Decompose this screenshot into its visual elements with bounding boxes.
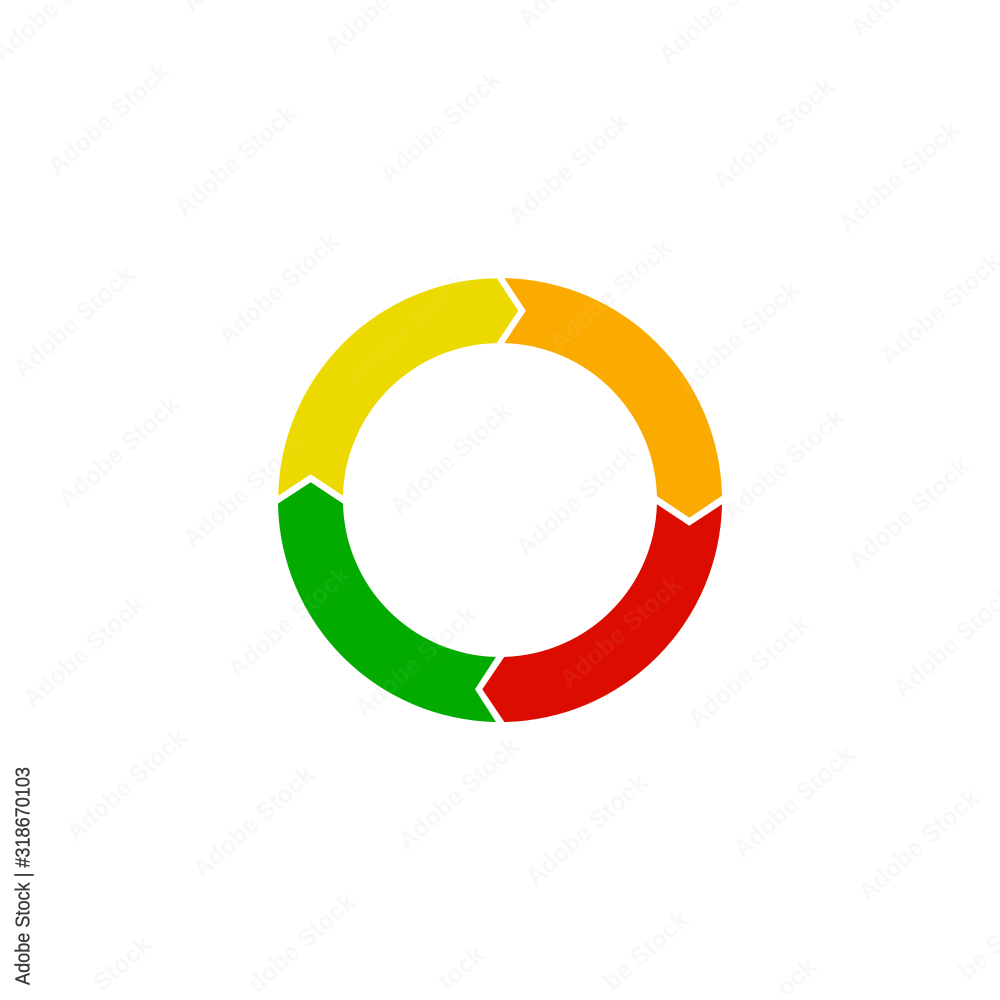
watermark over ring: Adobe Stock (341, 268, 473, 392)
watermark pattern: Adobe Stock (178, 430, 310, 554)
stock id label: Adobe Stock | #318670103 (12, 767, 34, 985)
watermark pattern: Adobe Stock (673, 275, 805, 399)
watermark pattern: Adobe Stock (43, 57, 175, 181)
watermark pattern: Adobe Stock (728, 740, 860, 864)
watermark over ring (280, 282, 690, 694)
watermark pattern: Adobe Stock (61, 723, 193, 847)
watermark pattern: Stock (88, 931, 157, 997)
watermark pattern: Adobe Stock (350, 600, 482, 724)
watermark pattern: Adobe Stock (521, 768, 653, 892)
watermark pattern: dobe Stock (242, 888, 361, 999)
watermark over ring: Adobe Stock (178, 430, 310, 554)
watermark pattern: tock (433, 941, 490, 996)
watermark pattern: Adobe Stock (18, 590, 150, 714)
watermark pattern: Adobe Stock (188, 760, 320, 884)
watermark pattern: Adobe Stock (385, 397, 517, 521)
arrow segment: orange (504, 278, 722, 518)
watermark pattern: Adobe Stock (545, 233, 677, 357)
arrow segment: red (482, 504, 722, 722)
watermark over ring: Adobe Stock (223, 560, 355, 684)
watermark pattern: Adobe Stock (393, 732, 525, 856)
watermark pattern: Adobe Stock (853, 783, 985, 907)
watermark pattern: Adobe Stock (833, 115, 965, 239)
watermark pattern: Adobe Stock (511, 438, 643, 562)
watermark pattern: Adobe Stock (555, 570, 687, 694)
watermark pattern: Adobe Stock (53, 390, 185, 514)
watermark pattern: Adobe Stock (503, 107, 635, 231)
watermark over ring: Adobe Stock (555, 570, 687, 694)
watermark pattern: Adobe Stock (843, 452, 975, 576)
watermark pattern: Adobe Stock (223, 560, 355, 684)
watermark pattern: Adobe Stock (213, 227, 345, 351)
watermark over ring: Adobe Stock (213, 227, 345, 351)
watermark pattern: Adobe Stock (375, 65, 507, 189)
watermark over ring: Adobe Stock (350, 600, 482, 724)
watermark pattern: be Stock (598, 906, 694, 996)
watermark pattern: Adobe Stock (8, 260, 140, 384)
watermark pattern: Adobe Stock (708, 72, 840, 196)
watermark pattern: Adobe Stock (683, 610, 815, 734)
watermark pattern: Adobe Stock (170, 99, 302, 223)
circular arrow cycle ring (278, 278, 722, 722)
watermark pattern: Adobe Stock (341, 268, 473, 392)
watermark over ring: Adobe Stock (545, 233, 677, 357)
arrow segment: green (278, 482, 496, 722)
watermark pattern: Adobe Stock (718, 403, 850, 527)
arrow segment: yellow (278, 278, 518, 496)
watermark over ring: Adobe Stock (673, 275, 805, 399)
